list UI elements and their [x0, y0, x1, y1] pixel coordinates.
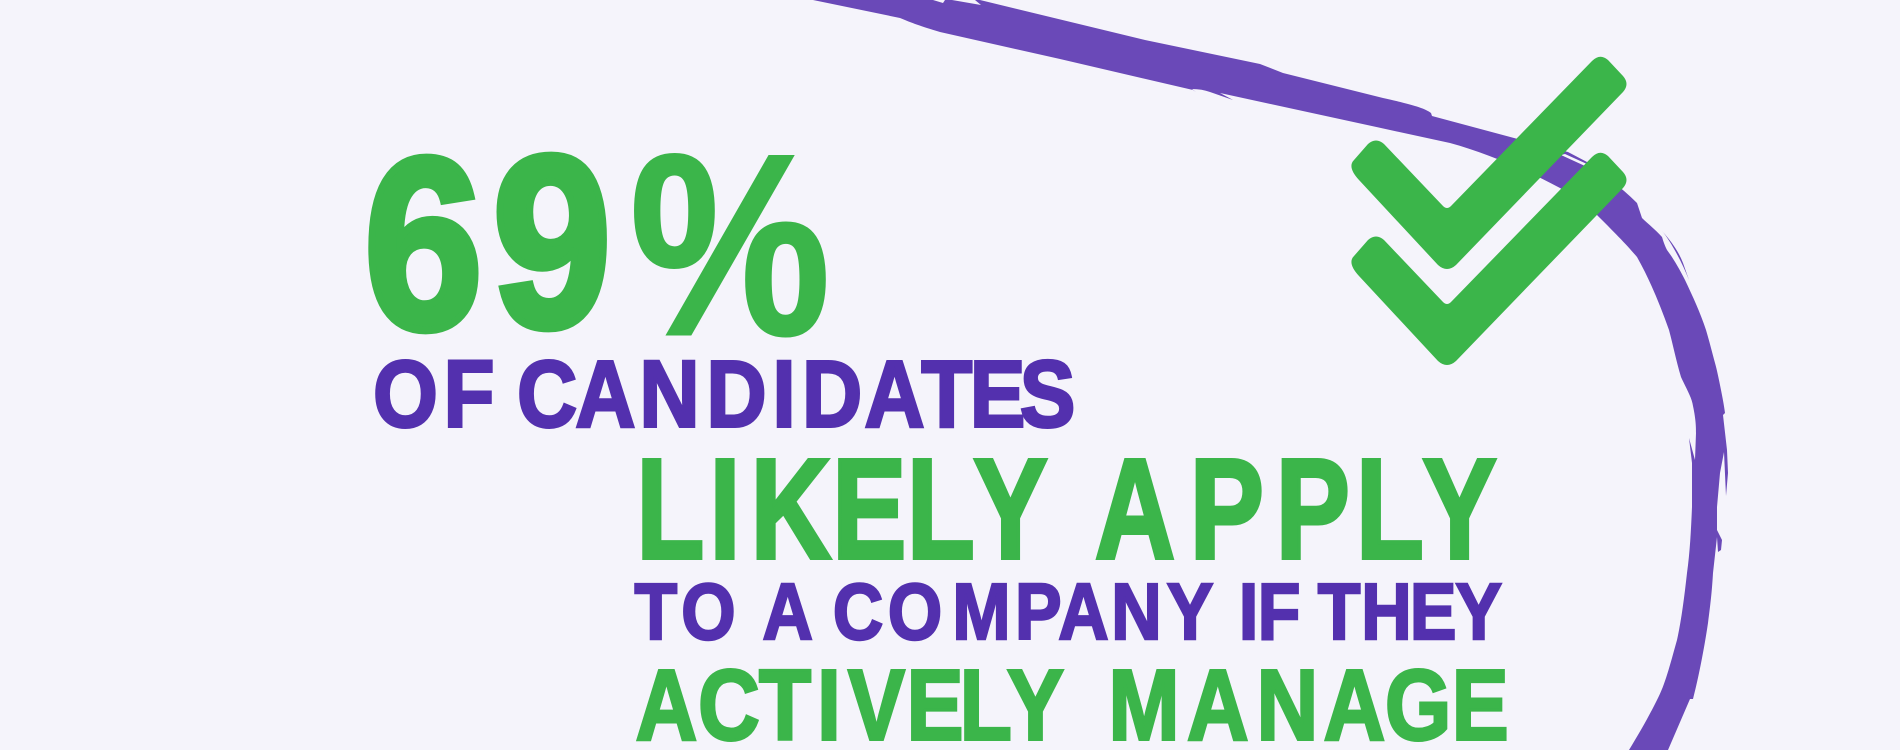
- big percentage: 69%: 69: [364, 105, 611, 380]
- brush stroke circle: [813, 0, 1728, 750]
- brush detail: top gaps: [933, 0, 1587, 166]
- text line: OF CANDIDATES: OF CANDIDATES: [373, 341, 1075, 447]
- big percentage: 69%: %: [630, 102, 830, 389]
- text line: TO A COMPANY IF THEY: TO A COMPANY IF THEY: [634, 567, 1502, 656]
- icon: top check mark: [1351, 57, 1626, 269]
- icon: bottom check mark: [1351, 153, 1626, 365]
- text line: LIKELY APPLY: LIKELY APPLY: [636, 430, 1497, 589]
- brush detail: outer sliver: [1662, 231, 1689, 280]
